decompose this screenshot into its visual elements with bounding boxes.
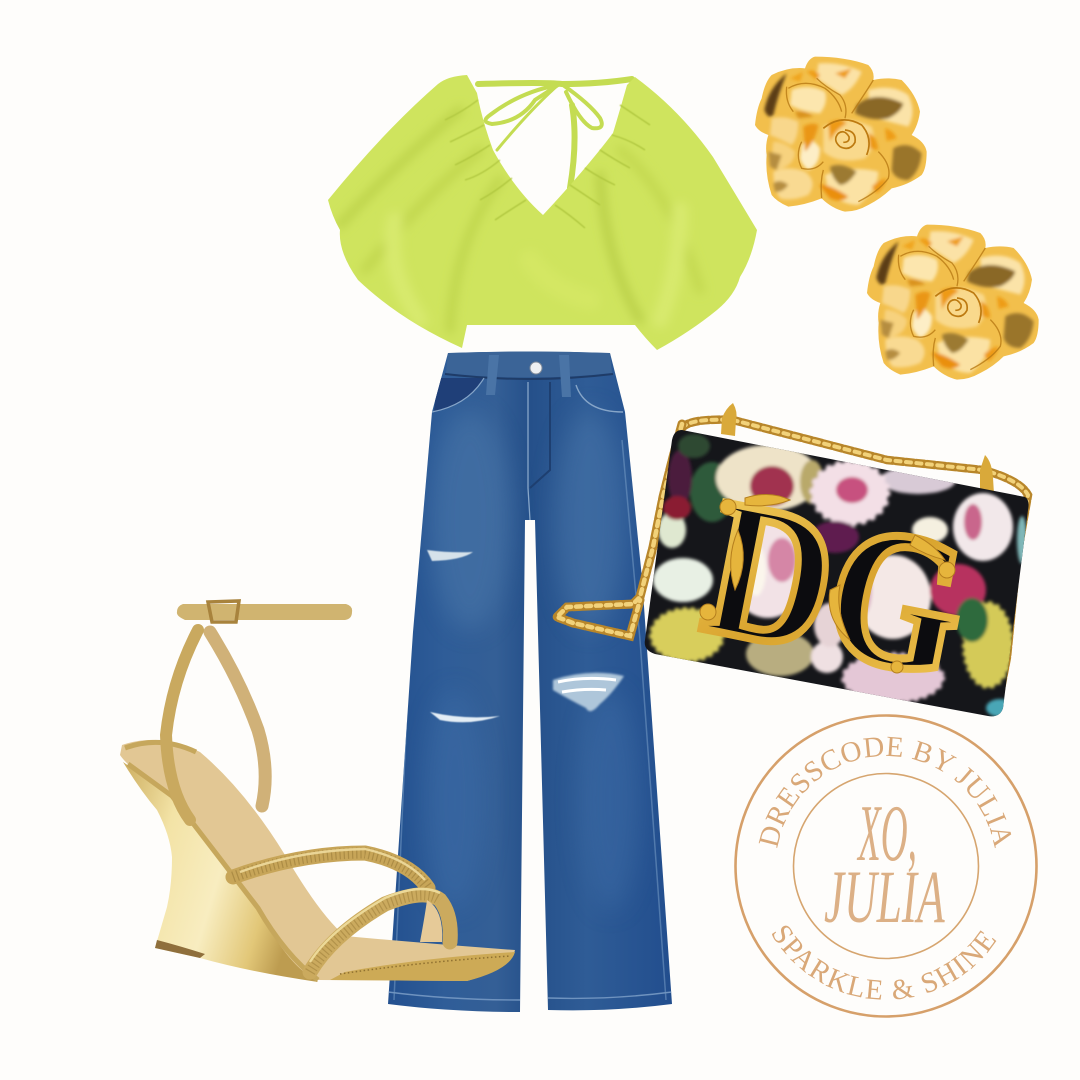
button — [530, 362, 542, 374]
wedge heel — [123, 762, 318, 982]
belt loops — [486, 355, 499, 395]
side seams — [393, 715, 408, 1000]
buckle — [208, 601, 239, 622]
DG ornament scrolls — [700, 494, 955, 673]
toe platform — [330, 952, 515, 981]
halter tie — [478, 79, 632, 188]
inner edge of strap two — [420, 900, 442, 942]
stamp signature: JULIA — [824, 857, 945, 939]
round brand stamp — [734, 714, 1038, 1018]
stamp signature — [824, 788, 945, 939]
top body — [328, 75, 757, 350]
ankle strap — [177, 604, 352, 620]
green crop top — [328, 75, 757, 350]
front back strap — [166, 630, 198, 820]
stamp bottom text: SPARKLE & SHINE — [772, 926, 996, 1000]
stamp signature: XO, — [856, 788, 917, 878]
gold flower earring, upper — [755, 57, 927, 212]
gathers at neckline — [445, 100, 650, 228]
fly and pocket stitching — [528, 382, 530, 520]
hem — [388, 992, 672, 1000]
stamp outer ring — [736, 716, 1036, 1016]
chain hardware — [721, 403, 737, 436]
dark pocket patch — [434, 378, 483, 412]
rips — [427, 550, 473, 561]
gold flower earring, lower — [867, 225, 1039, 380]
heel tip — [155, 940, 205, 958]
floral print — [651, 434, 1027, 717]
shading folds — [340, 110, 700, 330]
floral DG handbag — [557, 403, 1029, 719]
toe strap two — [310, 895, 450, 972]
insole — [120, 740, 515, 981]
stamp inner ring — [794, 774, 978, 958]
toe strap one — [233, 853, 428, 888]
bag body — [645, 430, 1029, 716]
chain — [557, 420, 1028, 710]
curved text paths — [776, 756, 996, 866]
blue wide-leg jeans — [388, 352, 672, 1012]
DG logo gold: DG — [690, 457, 982, 719]
back strap, inner — [210, 632, 265, 806]
waistband — [446, 352, 612, 378]
fade on thighs — [430, 410, 510, 630]
gold wedge sandal — [120, 601, 515, 982]
stamp top text: DRESSCODE BY JULIA — [758, 736, 1012, 848]
